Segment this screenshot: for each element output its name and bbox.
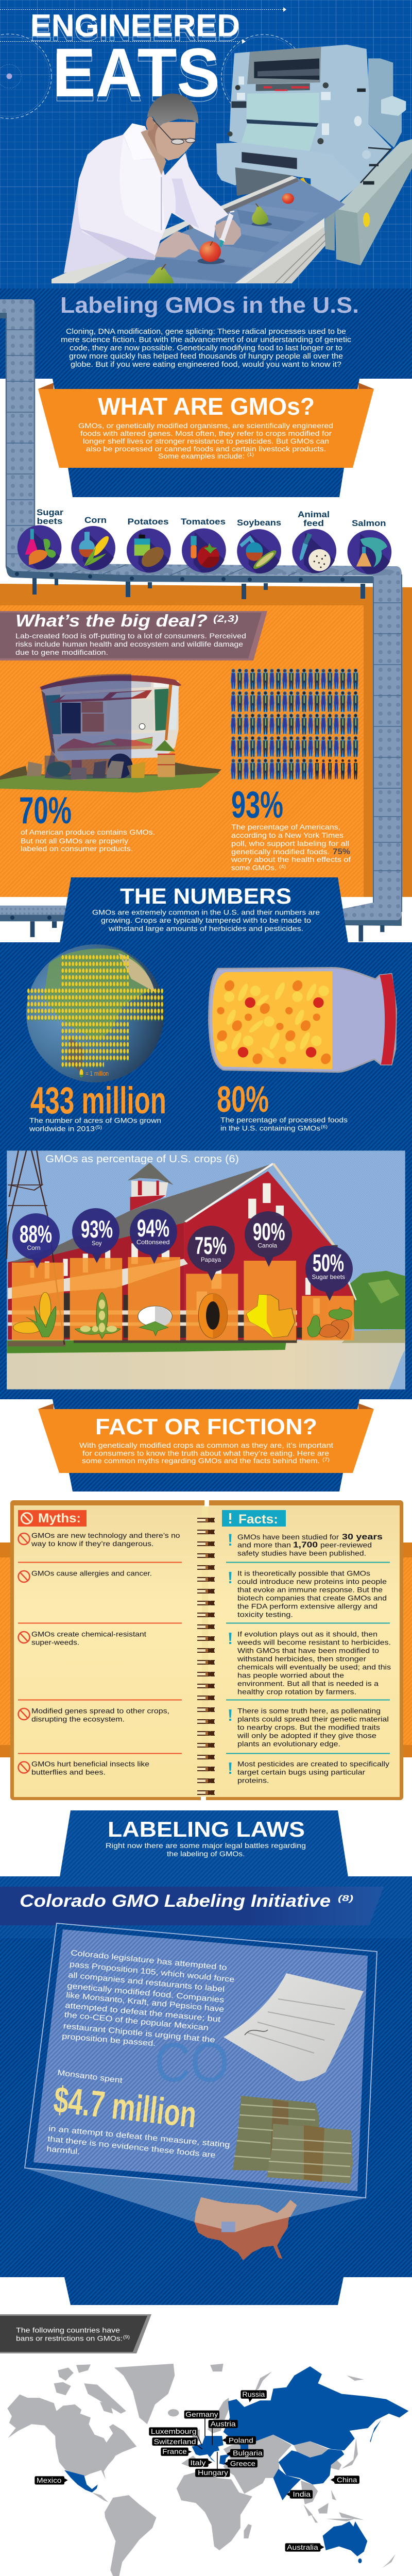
facts list: weeds will become resistant to herbicides. (237, 1638, 391, 1647)
spiral binding (197, 1511, 215, 1795)
facts list: withstand herbicides, then stronger (237, 1655, 366, 1663)
facts list: It is theoretically possible that GMOs (237, 1569, 370, 1578)
food labels: Soybeans (237, 518, 281, 528)
bubble: cottonseed 94 percent: 94% (137, 1214, 169, 1242)
legend: corn equals one million (79, 1069, 109, 1078)
illustration: jar of food (209, 968, 396, 1072)
illustration: conveyor belt (52, 176, 345, 283)
illustration: globe with corn (26, 944, 164, 1082)
heading: what are GMOs: WHAT ARE GMOs? (98, 393, 315, 420)
myths list: super-weeds. (31, 1638, 79, 1647)
text: Monsanto spent: in an attempt to defeat the measure, stating (48, 2124, 230, 2149)
facts list: healthy crop rotation by farmers. (237, 1688, 356, 1696)
bubble: corn 88 percent (12, 1213, 60, 1268)
fact or fiction paragraph: With genetically modified crops as common as they are, it’s important (79, 1441, 333, 1449)
world map (7, 2364, 408, 2576)
fact or fiction paragraph (79, 1441, 333, 1465)
title: EATS (53, 39, 220, 116)
orange background behind big deal (0, 584, 412, 897)
intro paragraph: code, they are now possible. Genetically modifying food to last longer or to (70, 344, 342, 352)
banner: big deal text: due to gene modification. (15, 648, 108, 656)
myths list: GMOs are new technology and there’s no (31, 1531, 180, 1539)
stat: 70 percent (19, 790, 155, 853)
stat: 80 percent: The percentage of processed foods (220, 1116, 348, 1124)
country labels: India (293, 2490, 311, 2498)
panel: what's the big deal (0, 605, 364, 897)
stat: 93 percent: 93% (231, 784, 283, 826)
illustration: produce cart (0, 674, 221, 792)
country labels: Australia (287, 2544, 318, 2551)
country labels: China (337, 2476, 357, 2484)
definition paragraph: GMOs, or genetically modified organisms, are scientifically engineered (78, 421, 333, 430)
section: the numbers background (0, 877, 412, 1399)
food labels: Animal (298, 510, 330, 519)
bubble: canola 90 percent (245, 1211, 292, 1267)
cone from map to panel (25, 2168, 366, 2222)
text: Colorado proposition: all companies and restaurants to label (68, 1971, 225, 1994)
panel: myths and facts notebook (10, 1500, 403, 1801)
facts list: that evoke an immune response. But the (237, 1586, 383, 1594)
icon: sugar beet crop (307, 1307, 352, 1338)
heading: labeling laws: LABELING LAWS (108, 1817, 305, 1841)
facts list: peer-reviewed (320, 1540, 372, 1549)
exclamation icons (229, 1534, 232, 1774)
illustration: scientist (64, 94, 241, 273)
banner: Colorado initiative: Colorado GMO Labeling Initiative (20, 1891, 331, 1911)
heading: fact or fiction: FACT OR FICTION? (95, 1414, 317, 1439)
bubble: papaya 75 percent (187, 1226, 235, 1281)
bubble: sugar beets 50 percent (305, 1246, 353, 1301)
illustration: apples and pears (147, 193, 294, 283)
heading: the numbers: THE NUMBERS (120, 884, 291, 909)
banner: what are GMOs (38, 379, 374, 497)
stat: 80 percent: (6) (321, 1124, 328, 1129)
facts list: the FDA perform extensive allergy and (237, 1602, 377, 1611)
myths list: GMOs create chemical-resistant (31, 1630, 146, 1638)
banner: Colorado initiative: (8) (338, 1893, 353, 1903)
icon: soy crop (75, 1292, 121, 1338)
country labels: Luxembourg (151, 2428, 197, 2435)
myths list: butterflies and bees. (31, 1768, 106, 1776)
text: Monsanto spent: $4.7 million (52, 2079, 198, 2136)
fact or fiction paragraph: for consumers to know the truth about what they’re eating. Here are (82, 1449, 329, 1457)
no-sign icons (19, 1533, 30, 1773)
country labels: Poland (229, 2436, 253, 2444)
title: ENGINEERED (30, 12, 240, 47)
intro paragraph (61, 327, 352, 369)
labeling laws paragraph: Right now there are some major legal battles regarding (106, 1841, 306, 1850)
illustration: document (224, 1973, 364, 2081)
icon: potato (127, 529, 174, 574)
stat: 433 million: worldwide in 2013 (29, 1124, 95, 1132)
numbers paragraph: growing. Crops are typically tampered with to be made to (101, 916, 311, 924)
definition paragraph (78, 421, 333, 460)
facts list (237, 1533, 391, 1785)
facts list: 1,700 (293, 1540, 318, 1550)
banner: big deal text: risks include human health and ecosystem and wildlife damage (15, 640, 243, 648)
fact or fiction paragraph: some common myths regarding GMOs and the facts behind them. (82, 1456, 320, 1465)
stat: 80 percent: in the U.S. containing GMOs (220, 1124, 320, 1132)
myths tag: Myths: (38, 1511, 81, 1526)
bubble: cottonseed 94 percent (130, 1209, 177, 1264)
text: Colorado proposition: like Monsanto, Kraft, and Pepsico have (66, 1991, 225, 2014)
facts list: Most pesticides are created to specifically (237, 1760, 389, 1768)
text: Colorado proposition: proposition be passed. (62, 2032, 156, 2048)
facts list: target certain bugs using particular (237, 1768, 365, 1776)
panel: Colorado magnified (25, 1923, 377, 2198)
stat: 70 percent: But not all GMOs are properly (21, 837, 128, 845)
definition paragraph: Some examples include: (158, 452, 245, 460)
stat: 70 percent: of American produce contains GMOs. (21, 828, 155, 836)
stat: 93 percent (231, 784, 351, 872)
stat: 93 percent: (4) (279, 864, 286, 869)
country labels: Mexico (37, 2477, 62, 2484)
facts list: plants an evolutionary edge. (237, 1739, 340, 1748)
stat: 70 percent: labeled on consumer products. (21, 844, 133, 853)
country labels: France (162, 2448, 187, 2455)
stat: 433 million (29, 1080, 166, 1132)
food labels: Potatoes (128, 517, 169, 527)
myths list: GMOs hurt beneficial insects like (31, 1760, 149, 1768)
icon: canola crop (247, 1295, 295, 1338)
text: Monsanto spent: that there is no evidence these foods are (47, 2134, 216, 2160)
food labels: feed (303, 519, 324, 528)
labeling laws paragraph: the labeling of GMOs. (167, 1850, 245, 1858)
food labels: Tomatoes (181, 517, 226, 527)
header background (0, 0, 412, 289)
intro paragraph: grow more quickly has helped feed thousands of hungry people all over the (69, 352, 343, 361)
country labels: Switzerland (153, 2438, 196, 2446)
text: Colorado proposition: pass Proposition 105, which would force (69, 1960, 235, 1984)
title: ENGINEERED (30, 8, 240, 43)
stat: 93 percent: worry about the health effects of (231, 855, 351, 863)
definition paragraph: longer shelf lives or stronger resistance to pesticides. But GMOs can (83, 437, 329, 445)
facts list: will only be adopted if they give those (237, 1731, 376, 1739)
banner: fact or fiction (38, 1399, 374, 1492)
icon: papaya crop (198, 1294, 228, 1338)
myths list: disrupting the ecosystem. (31, 1715, 125, 1723)
icon: corn crop (13, 1292, 56, 1337)
stat: 70 percent: 70% (19, 790, 72, 832)
bubble: cottonseed 94 percent: Cottonseed (136, 1239, 170, 1246)
labeling laws paragraph (106, 1841, 306, 1858)
banner: big deal text: (2,3) (213, 614, 238, 624)
myths list (31, 1531, 180, 1776)
banner: countries with bans: bans or restrictions on GMOs: (16, 2334, 123, 2342)
banner: Colorado initiative (0, 1887, 384, 1925)
illustration: printing machine (216, 45, 412, 265)
country labels: Russia (242, 2391, 265, 2398)
bubble: sugar beets 50 percent: Sugar beets (312, 1274, 345, 1281)
bubble: sugar beets 50 percent: 50% (313, 1249, 344, 1277)
orange band behind book (0, 1543, 412, 1757)
facts tag (222, 1510, 286, 1527)
facts list: There is some truth here, as pollenating (237, 1706, 381, 1715)
bubble: soy 93 percent: Soy (92, 1240, 102, 1247)
food labels: beets (37, 517, 63, 526)
facts list: 30 years (342, 1533, 383, 1541)
title (30, 8, 240, 116)
bubble: soy 93 percent: 93% (81, 1215, 113, 1243)
myths list: way to know if they’re dangerous. (31, 1539, 154, 1548)
bubble: canola 90 percent: Canola (258, 1242, 277, 1249)
definition paragraph: (1) (247, 452, 254, 457)
banner: countries with bans: The following countries have (16, 2326, 120, 2334)
orange crop bars (12, 1257, 354, 1341)
stat: 93 percent: some GMOs. (231, 863, 277, 872)
stat: 80 percent (217, 1079, 348, 1132)
band: labeling GMOs (0, 289, 412, 379)
food labels: Sugar (37, 508, 64, 517)
facts list: proteins. (237, 1776, 269, 1785)
heading: Labeling GMOs in the U.S.: Labeling GMOs in the U.S. (60, 293, 359, 318)
stat: 433 million: (5) (95, 1125, 102, 1130)
text: Colorado proposition: the co-CEO of the popular Mexican (64, 2010, 209, 2032)
text: Monsanto spent: harmful. (46, 2145, 80, 2156)
stat: 93 percent: genetically modified foods. (231, 848, 330, 856)
facts list: environment. But all that is needed is a (237, 1680, 379, 1688)
facts tag: Facts: (238, 1512, 278, 1527)
conveyor: lower pipe legs (0, 906, 384, 942)
country labels (35, 2390, 359, 2552)
stat: 433 million: 433 million (30, 1080, 166, 1122)
country labels: Italy (190, 2459, 206, 2467)
facts list: plants could spread their genetic material (237, 1715, 389, 1723)
food icons on conveyor (18, 525, 394, 575)
barn heading: GMOs as percentage of U.S. crops (6) (45, 1154, 239, 1165)
banner: big deal text: What’s the big deal? (15, 611, 208, 630)
facts list: biotech companies that create GMOs and (237, 1594, 387, 1602)
banner: big deal text: Lab-created food is off-putting to a lot of consumers. Perceived (15, 632, 246, 640)
myths tag (18, 1510, 87, 1527)
bubble: papaya 75 percent: Papaya (201, 1256, 221, 1263)
section: labeling laws background (0, 1810, 412, 2277)
food labels: Corn (84, 516, 107, 525)
numbers paragraph: withstand large amounts of herbicides and pesticides. (108, 924, 303, 933)
stat: 93 percent: 75% (333, 848, 350, 856)
text: Monsanto spent: Monsanto spent (57, 2069, 124, 2085)
facts list: With GMOs that have been modified to (237, 1647, 379, 1655)
facts list: GMOs have been studied for (237, 1533, 339, 1541)
intro paragraph: globe. But if you were eating engineered food, would you want to know it? (71, 360, 341, 369)
banner: big deal text (0, 611, 267, 660)
text: Colorado proposition: genetically modified food. Companies (67, 1981, 225, 2005)
myths list: Modified genes spread to other crops, (31, 1706, 169, 1715)
icon: sugar beet (18, 525, 64, 571)
facts list: chemicals will eventually be used; and this (237, 1663, 391, 1671)
Colorado initials: CO (154, 2031, 229, 2093)
stat: 93 percent: according to a New York Times (231, 831, 344, 839)
title: EATS (53, 35, 220, 111)
country labels: Germany (185, 2411, 218, 2418)
conveyor pipe (0, 299, 402, 926)
icon: corn (71, 526, 118, 572)
icon: animal feed (292, 529, 339, 574)
text: Colorado proposition: restaurant Chipotle is urging that the (63, 2022, 215, 2044)
icon: soybean (237, 529, 284, 575)
food labels: Salmon (352, 519, 386, 528)
stat: 93 percent: poll, who support labeling for all (231, 839, 349, 848)
bubble: soy 93 percent (72, 1208, 119, 1263)
stat: 93 percent: The percentage of Americans, (231, 823, 340, 831)
bubble: papaya 75 percent: 75% (195, 1232, 227, 1259)
icon: salmon (347, 530, 394, 575)
definition paragraph: foods with altered genes. Most often, they refer to crops modified for (80, 429, 332, 437)
facts list: safety studies have been published. (237, 1549, 366, 1557)
stat: 433 million: The number of acres of GMOs grown (29, 1116, 161, 1124)
facts list: toxicity testing. (237, 1611, 293, 1619)
numbers paragraph: GMOs are extremely common in the U.S. and their numbers are (92, 908, 320, 916)
icon: cotton crop (138, 1306, 172, 1336)
country labels: Hungary (198, 2469, 228, 2477)
text: Colorado proposition (62, 1948, 235, 2048)
bubble: corn 88 percent: Corn (27, 1244, 40, 1251)
facts list: If evolution plays out as it should, then (237, 1630, 377, 1638)
country labels: Bulgaria (233, 2449, 263, 2457)
country labels: Austria (211, 2420, 236, 2428)
facts list: and more than (237, 1540, 291, 1549)
banner: countries with bans: (9) (123, 2334, 130, 2340)
numbers paragraph (92, 908, 320, 933)
intro paragraph: mere science fiction. But with the advancement of our understanding of genetic (61, 335, 352, 344)
fact or fiction paragraph: (7) (322, 1457, 330, 1462)
definition paragraph: also be processed or canned foods and certain livestock products. (86, 445, 326, 453)
gray continents (7, 2364, 396, 2576)
text: Colorado proposition: Colorado legislature has attempted to (71, 1948, 227, 1972)
illustration: U.S. map (195, 2197, 297, 2260)
legend: corn equals one million: = 1 million (85, 1070, 109, 1077)
illustration: money stacks (233, 2096, 353, 2183)
illustration: barn scene (7, 1150, 405, 1389)
country labels: Greece (230, 2460, 255, 2467)
banner: countries with bans (0, 2314, 151, 2353)
facts list: could introduce new proteins into people (237, 1578, 387, 1586)
food labels (37, 508, 386, 528)
text: Monsanto spent (46, 2069, 230, 2160)
facts list: has people worried about the (237, 1671, 344, 1680)
facts list: to nearby crops. But the modified traits (237, 1723, 380, 1731)
myths list: GMOs cause allergies and cancer. (31, 1569, 152, 1578)
tab below Colorado (64, 2277, 344, 2305)
intro paragraph: Cloning, DNA modification, gene splicing: These radical processes used to be (66, 327, 346, 336)
bubble: canola 90 percent: 90% (253, 1218, 285, 1245)
icon: tomato (182, 529, 229, 574)
bubble: corn 88 percent: 88% (20, 1220, 52, 1248)
people grid: 93 percent (230, 668, 359, 781)
blue highlighted countries (64, 2366, 408, 2563)
stat: 80 percent: 80% (217, 1079, 269, 1120)
text: Colorado proposition: attempted to defeat the measure; but (65, 2001, 221, 2024)
